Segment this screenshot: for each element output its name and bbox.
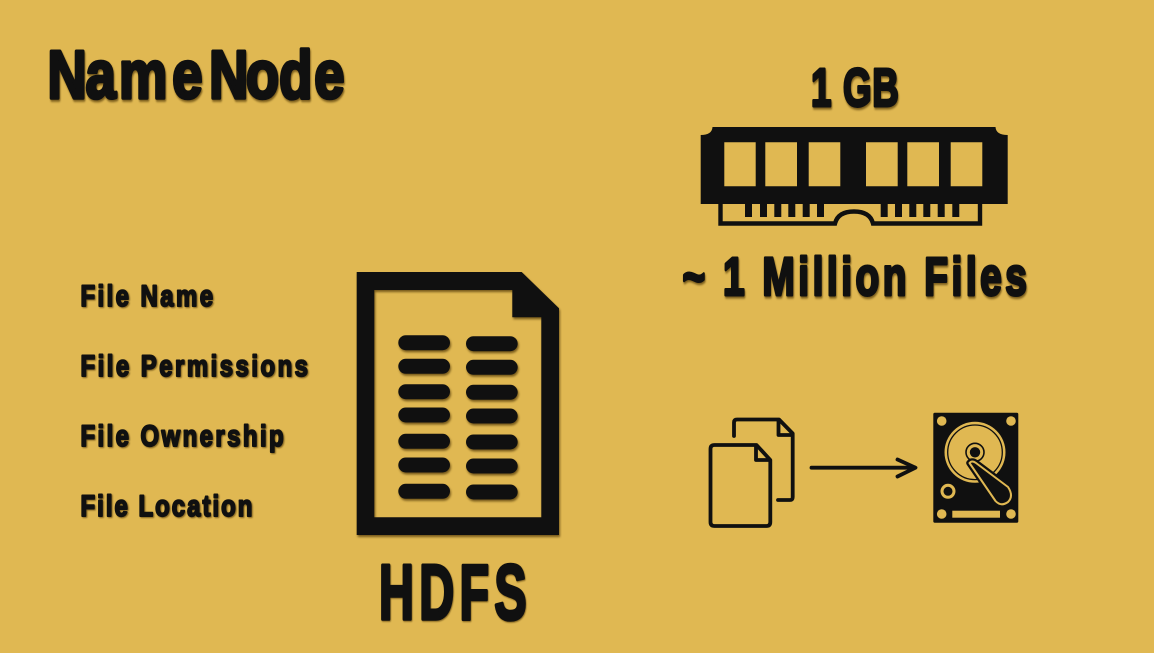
title: NameNode: NameNode xyxy=(48,37,345,113)
label: HDFS: HDFS xyxy=(379,548,532,636)
icon: stacked files xyxy=(710,420,793,526)
text: File Location: File Location xyxy=(80,488,254,523)
text: File Name: File Name xyxy=(80,278,215,313)
text: ~ 1 Million Files: ~ 1 Million Files xyxy=(682,246,1030,306)
icon: hard disk drive xyxy=(933,413,1018,523)
arrow: files to disk xyxy=(812,460,916,476)
icon: RAM memory module xyxy=(701,127,1008,224)
icon: HDFS document xyxy=(357,272,559,535)
heading: 1 GB: 1 GB xyxy=(811,57,899,118)
text: File Ownership: File Ownership xyxy=(80,418,286,453)
text: File Permissions: File Permissions xyxy=(80,348,310,383)
list: file metadata xyxy=(80,278,310,523)
